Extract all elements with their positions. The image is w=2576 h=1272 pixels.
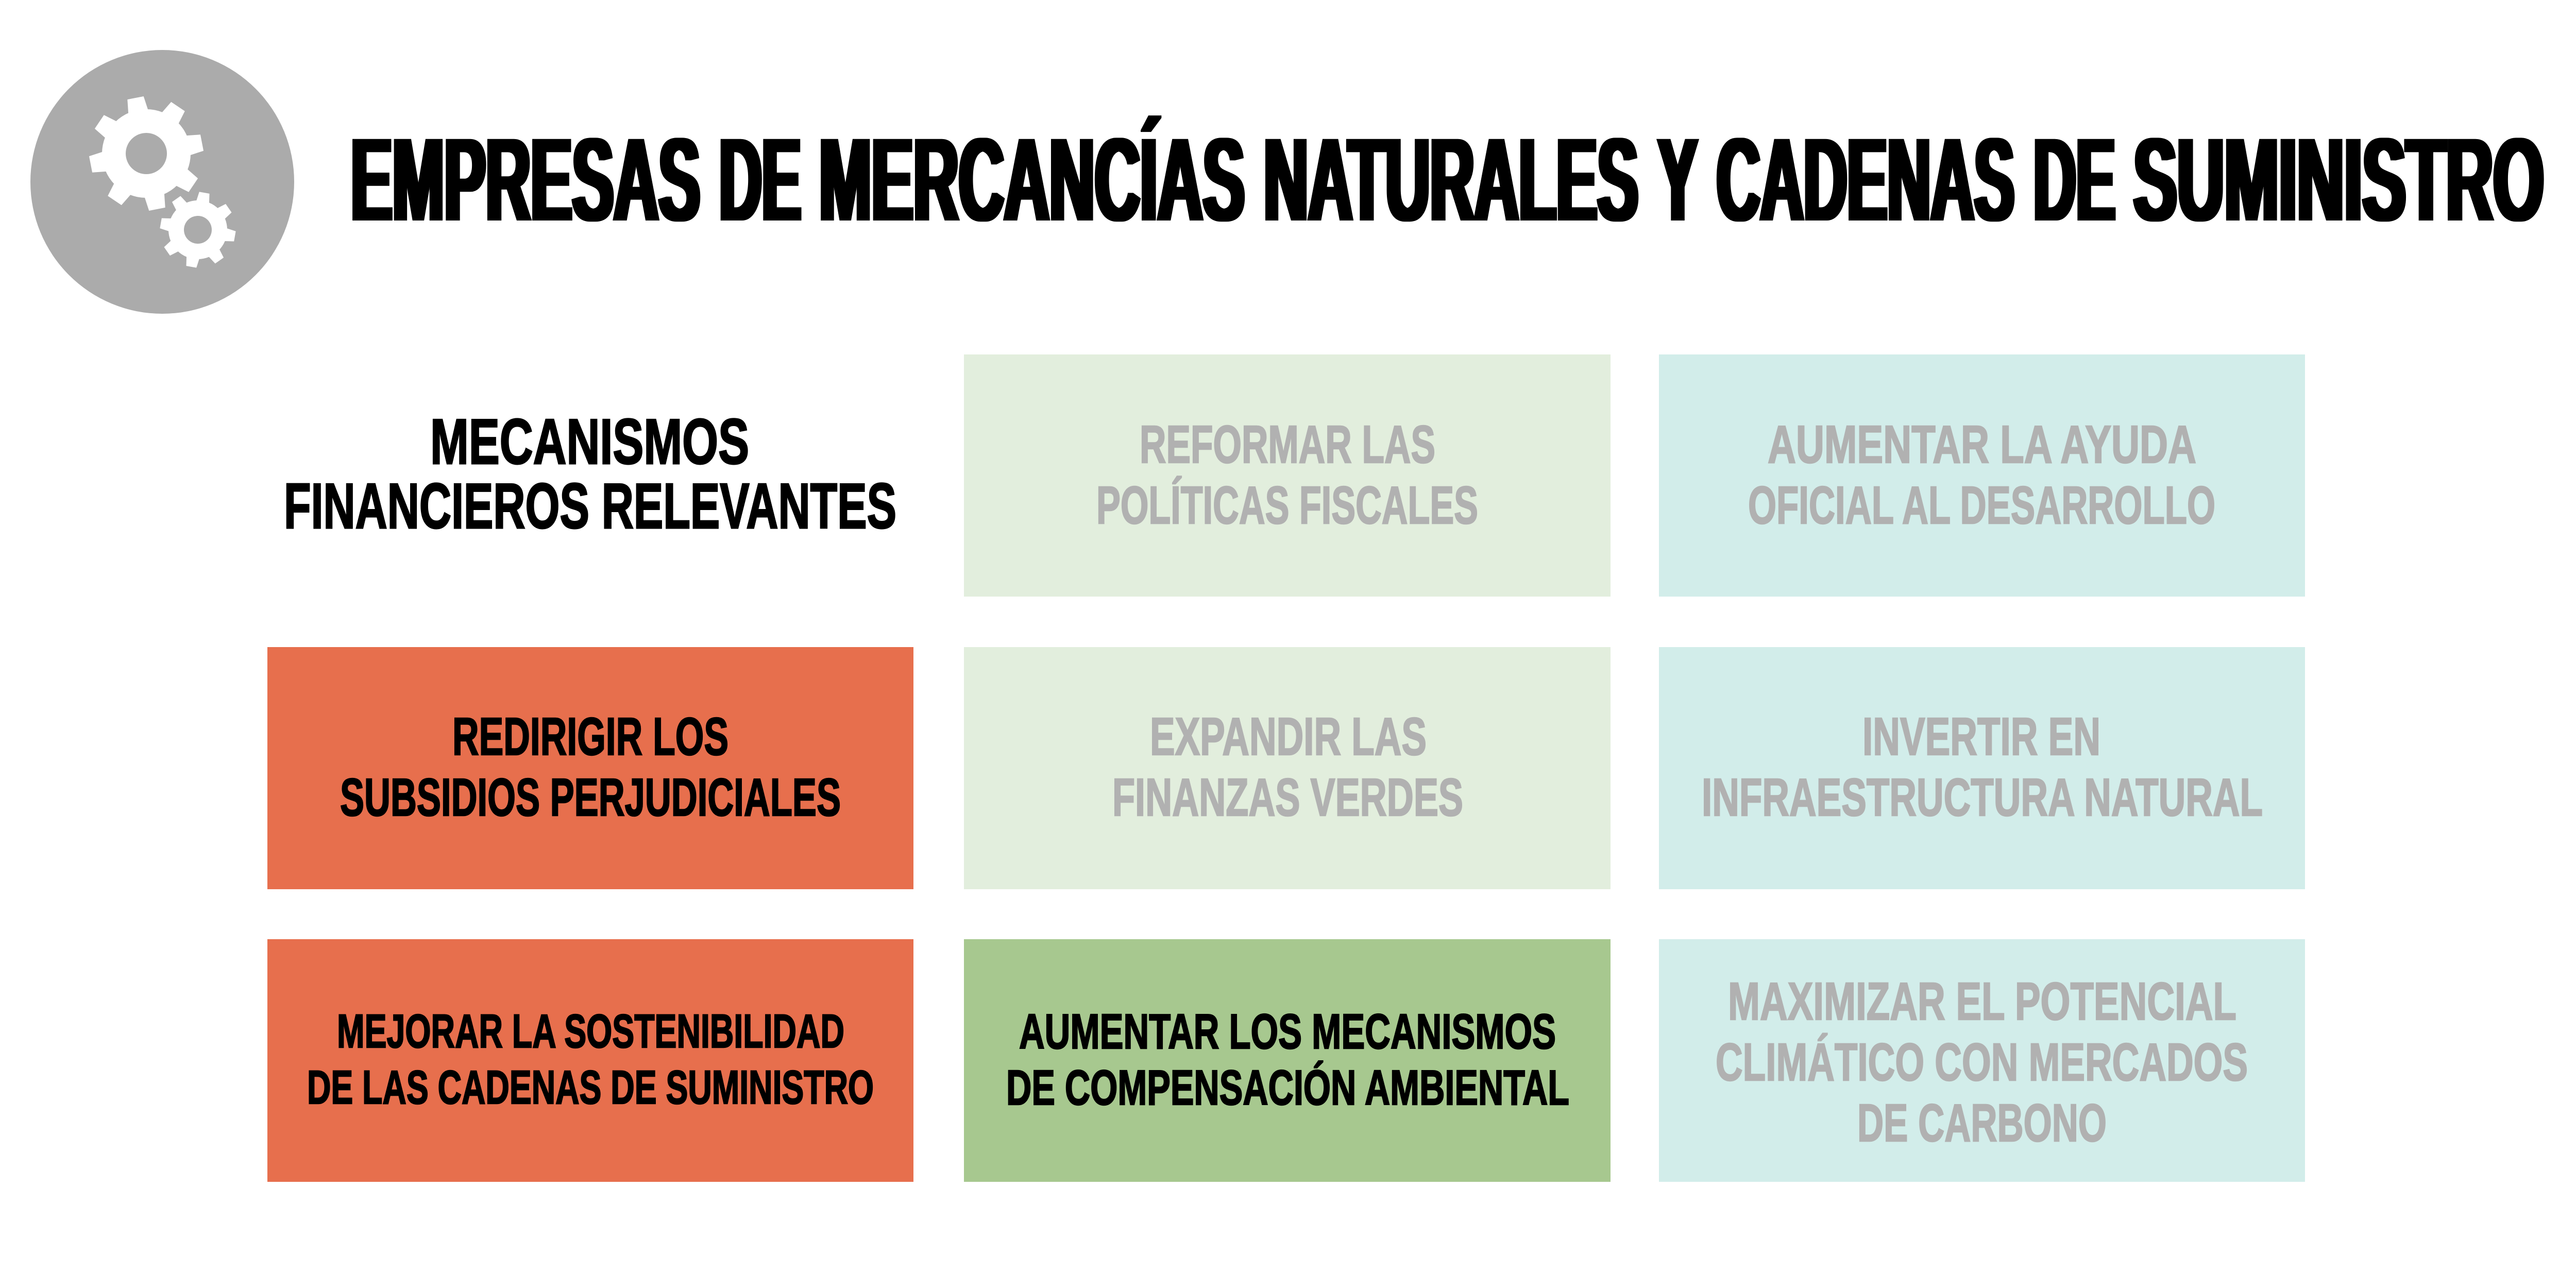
panel: aumentar la ayuda oficial al desarrollo: AUMENTAR LA AYUDA <box>1768 415 2196 474</box>
panel: invertir en infraestructura natural: INVERTIR EN <box>1862 707 2100 766</box>
icon: small gear <box>160 192 236 268</box>
panel: expandir las finanzas verdes <box>964 647 1611 889</box>
title: DE <box>2033 113 2115 246</box>
panel: aumentar los mecanismos de compensación ambiental: AUMENTAR LOS MECANISMOS <box>1019 1004 1556 1059</box>
title: EMPRESAS <box>351 113 700 246</box>
panel: invertir en infraestructura natural <box>1659 647 2305 889</box>
panel: mejorar la sostenibilidad de las cadenas de suministro <box>267 939 913 1182</box>
panel: redirigir los subsidios perjudiciales <box>267 647 913 889</box>
panel: reformar las políticas fiscales: POLÍTICAS FISCALES <box>1096 476 1478 535</box>
heading: relevant financial mechanisms: FINANCIEROS RELEVANTES <box>284 471 896 542</box>
panel: maximizar el potencial climático con mercados de carbono: CLIMÁTICO CON MERCADOS <box>1716 1032 2248 1092</box>
title: MERCANCÍAS <box>819 113 1245 246</box>
panel: reformar las políticas fiscales <box>964 354 1611 597</box>
icon: gears in grey circle <box>30 50 294 314</box>
panel: invertir en infraestructura natural: INFRAESTRUCTURA NATURAL <box>1702 768 2263 827</box>
panel: aumentar la ayuda oficial al desarrollo: OFICIAL AL DESARROLLO <box>1748 476 2215 535</box>
heading: relevant financial mechanisms: MECANISMOS <box>430 406 749 478</box>
panel: reformar las políticas fiscales: REFORMAR LAS <box>1140 415 1435 474</box>
panel: aumentar los mecanismos de compensación ambiental <box>964 939 1611 1182</box>
panel: mejorar la sostenibilidad de las cadenas de suministro: DE LAS CADENAS DE SUMINISTRO <box>307 1061 874 1114</box>
panel: maximizar el potencial climático con mercados de carbono: MAXIMIZAR EL POTENCIAL <box>1728 972 2236 1031</box>
panel: redirigir los subsidios perjudiciales: SUBSIDIOS PERJUDICIALES <box>340 768 841 827</box>
panel: aumentar la ayuda oficial al desarrollo <box>1659 354 2305 597</box>
title <box>351 113 2544 246</box>
panel: redirigir los subsidios perjudiciales: REDIRIGIR LOS <box>452 707 728 766</box>
title: DE <box>719 113 801 246</box>
panel: expandir las finanzas verdes: FINANZAS VERDES <box>1112 768 1463 827</box>
panel: aumentar los mecanismos de compensación ambiental: DE COMPENSACIÓN AMBIENTAL <box>1006 1060 1569 1115</box>
title: CADENAS <box>1717 113 2014 246</box>
title: NATURALES <box>1264 113 1638 246</box>
panel: mejorar la sostenibilidad de las cadenas de suministro: MEJORAR LA SOSTENIBILIDAD <box>337 1005 844 1058</box>
panel: maximizar el potencial climático con mercados de carbono <box>1659 939 2305 1182</box>
heading: relevant financial mechanisms <box>284 406 896 542</box>
icon: large gear <box>89 96 204 211</box>
panel: maximizar el potencial climático con mercados de carbono: DE CARBONO <box>1857 1093 2107 1152</box>
title: Y <box>1658 113 1698 246</box>
panel: expandir las finanzas verdes: EXPANDIR LAS <box>1150 707 1427 766</box>
